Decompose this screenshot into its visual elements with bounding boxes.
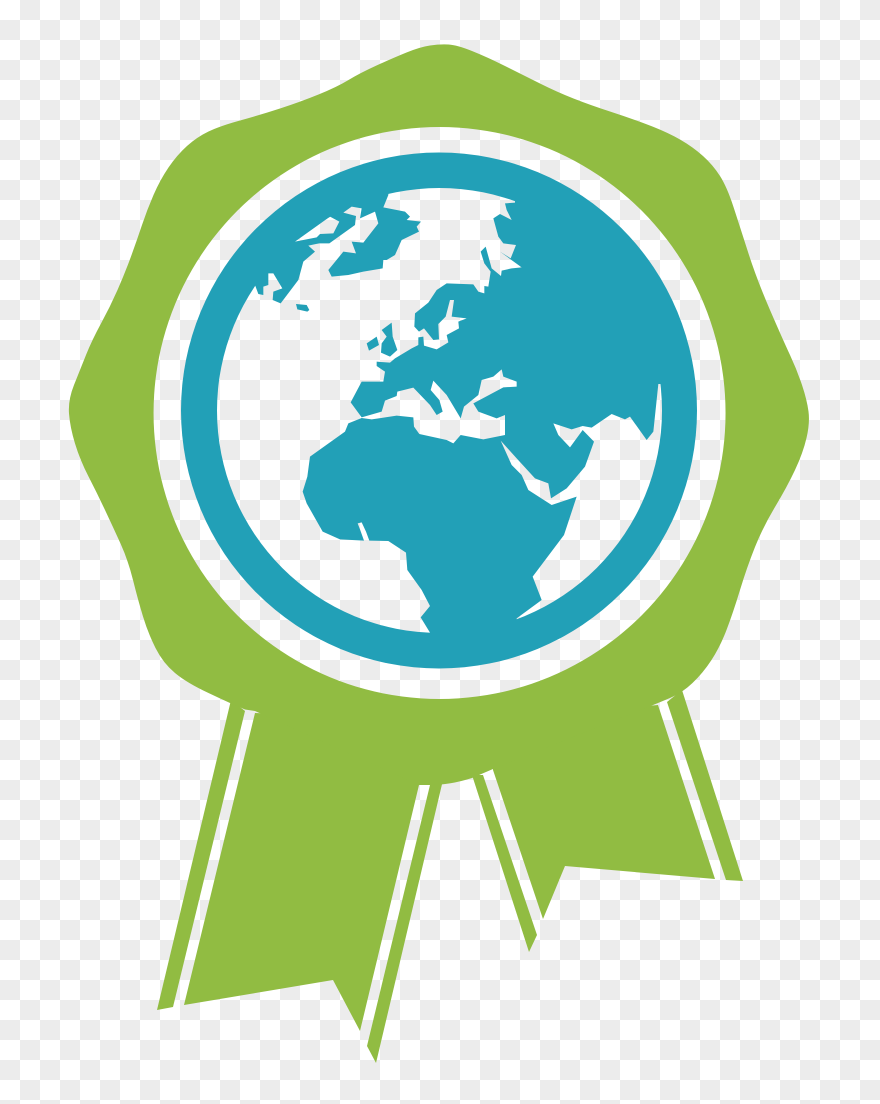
teal globe with continents bbox=[181, 152, 697, 668]
green rosette seal bbox=[69, 44, 809, 785]
right ribbon bbox=[472, 690, 743, 952]
left ribbon bbox=[157, 700, 443, 1063]
